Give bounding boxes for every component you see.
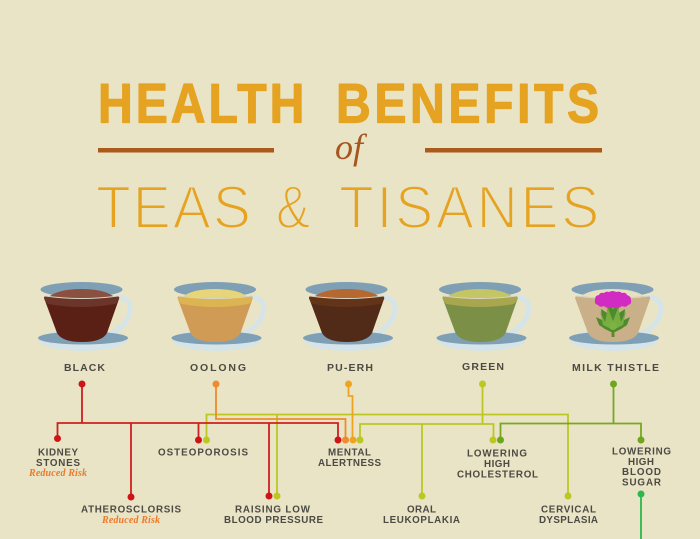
- title: [96, 73, 602, 241]
- label: raising low blood pressure: [224, 504, 323, 526]
- connectors: pu-erh amber: [345, 380, 356, 444]
- label: osteoporosis: OSTEOPOROSIS: [158, 448, 248, 458]
- label: cervical dysplasia: CERVICAL: [541, 504, 596, 516]
- label: lowering high blood sugar: LOWERING: [612, 446, 671, 458]
- right title rule: [425, 148, 602, 152]
- label: lowering high cholesterol: HIGH: [484, 459, 510, 470]
- label: raising low blood pressure: BLOOD PRESSURE: [224, 515, 323, 526]
- label: lowering high cholesterol: LOWERING: [467, 448, 527, 460]
- label: mental alertness: MENTAL: [328, 448, 371, 458]
- icon: green tea cup: [436, 282, 529, 351]
- tea labels: BLACK: [64, 362, 105, 374]
- icon: milk thistle cup: [569, 282, 661, 351]
- label: cervical dysplasia: DYSPLASIA: [539, 515, 598, 526]
- label: kidney stones: Reduced Risk: [28, 468, 87, 479]
- tea labels: GREEN: [462, 361, 504, 373]
- label: lowering high blood sugar: BLOOD: [622, 467, 661, 478]
- label: lowering high cholesterol: CHOLESTEROL: [457, 470, 538, 480]
- label: lowering high blood sugar: SUGAR: [622, 478, 661, 488]
- label: kidney stones: [28, 448, 87, 479]
- label: oral leukoplakia: [383, 504, 460, 526]
- left title rule: [98, 148, 274, 152]
- tea labels: OOLONG: [190, 362, 246, 374]
- label: lowering high blood sugar: HIGH: [628, 457, 654, 468]
- connectors: black red: [54, 380, 342, 500]
- icon: oolong tea cup: [172, 282, 264, 351]
- label: atherosclorsis: [81, 504, 181, 526]
- label: cervical dysplasia: [539, 504, 598, 526]
- label: atherosclorsis: ATHEROSCLORSIS: [81, 504, 181, 516]
- heading: teas and tisanes: &: [276, 175, 310, 241]
- connector: bright green continuation: [638, 490, 644, 539]
- label: mental alertness: ALERTNESS: [318, 458, 381, 469]
- heading: teas and tisanes: TEAS: [96, 175, 251, 241]
- tea labels: MILK THISTLE: [572, 362, 659, 374]
- label: oral leukoplakia: LEUKOPLAKIA: [383, 515, 460, 526]
- heading: teas and tisanes: TISANES: [339, 175, 599, 241]
- icon: thistle flower: [595, 291, 631, 337]
- label: atherosclorsis: Reduced Risk: [101, 515, 160, 526]
- heading: health benefits: BENEFITS: [336, 73, 599, 135]
- connectors: milk thistle: [497, 380, 644, 444]
- connectors: lime tree: [203, 414, 572, 500]
- heading: health benefits: HEALTH: [98, 73, 304, 135]
- heading: teas and tisanes: [96, 175, 599, 241]
- label: lowering high blood sugar: [612, 446, 671, 488]
- tea labels: [64, 361, 659, 374]
- icon: black tea cup: [38, 282, 130, 351]
- icon: pu-erh tea cup: [303, 282, 395, 351]
- label: kidney stones: KIDNEY: [38, 448, 78, 458]
- label: kidney stones: STONES: [36, 458, 80, 469]
- heading: health benefits: [98, 73, 599, 135]
- label: oral leukoplakia: ORAL: [407, 504, 436, 516]
- label: raising low blood pressure: RAISING LOW: [235, 504, 311, 516]
- label: lowering high cholesterol: [457, 448, 538, 480]
- label: mental alertness: [318, 448, 381, 469]
- connectors: green tea: [356, 380, 496, 500]
- heading: of: of: [335, 127, 368, 167]
- connectors: oolong orange: [212, 380, 349, 444]
- tea labels: PU-ERH: [327, 362, 373, 374]
